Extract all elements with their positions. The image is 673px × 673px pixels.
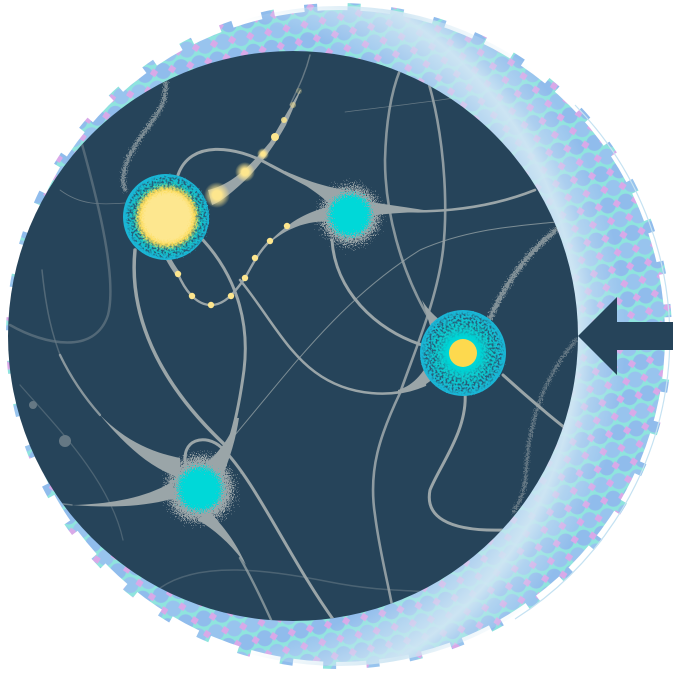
faint background fibres	[10, 55, 576, 592]
soma halo: lower neuron	[167, 456, 233, 522]
tapered dendrites	[72, 90, 448, 565]
yellow-beaded axon	[178, 241, 270, 305]
yellow signal pulses on axon	[175, 88, 302, 308]
soma: upper neuron nucleus	[329, 194, 371, 236]
neuron network	[10, 55, 576, 622]
active neuron: right	[420, 310, 506, 396]
active neuron: top left	[123, 174, 209, 260]
soma: lower neuron nucleus	[178, 467, 222, 511]
soma halo: upper neuron	[321, 186, 379, 244]
dark central circle	[8, 51, 578, 621]
thin long fibres	[40, 55, 565, 622]
arrow pointing left	[578, 297, 673, 375]
